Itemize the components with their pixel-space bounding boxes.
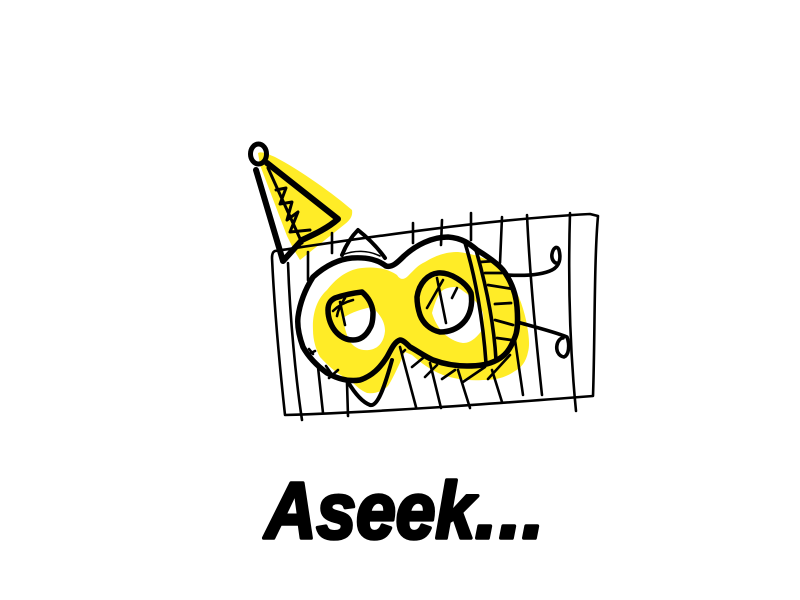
yellow fill: party hat (258, 152, 352, 260)
top ear (342, 230, 385, 258)
left eye (328, 292, 373, 340)
left eye glint lines (333, 298, 353, 325)
mask strap (465, 243, 513, 363)
squiggle arm bottom (517, 322, 569, 357)
title: . (499, 466, 521, 555)
mask outline (298, 237, 518, 381)
title: . (522, 466, 544, 555)
panel stripes (288, 213, 576, 420)
right eye glint lines (427, 278, 457, 323)
hat outline (256, 163, 338, 261)
bottom ear (348, 360, 392, 405)
strap hatching (480, 261, 513, 340)
yellow fill: mask (313, 252, 529, 393)
illustration: party mask character on striped panel (250, 144, 598, 420)
party hat (250, 144, 338, 261)
title: Aseek (263, 466, 478, 555)
mask ears (342, 230, 392, 405)
right eye (417, 273, 472, 332)
striped panel outline (272, 214, 598, 415)
hat pompom (250, 144, 266, 164)
squiggle arm top (507, 247, 560, 275)
title: . (475, 466, 497, 555)
bottom ticks (307, 349, 510, 382)
hat zigzag trim (268, 168, 310, 243)
